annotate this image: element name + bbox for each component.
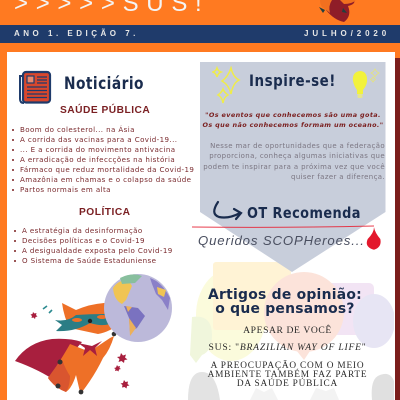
- list: saúde pública: Amazônia em chamas e o colapso da saúde: [20, 175, 191, 184]
- panel: Inspire-se arrow shape: [200, 62, 386, 272]
- icon: light bulb: [352, 68, 380, 98]
- article: meio ambiente: [208, 360, 367, 389]
- body text: Inspire-se: [203, 142, 385, 181]
- body text: Inspire-se: proporciona, conheça algumas iniciativas que: [209, 152, 385, 160]
- paws: [56, 332, 116, 394]
- handwritten text: Queridos SCOPHeroes...: [198, 233, 365, 248]
- icon: sparkles: [212, 66, 240, 104]
- list: saúde pública: Partos normais em alta: [20, 185, 111, 194]
- heading: Saúde Pública: SAÚDE PÚBLICA: [60, 105, 150, 116]
- dark red side strip: [394, 58, 400, 400]
- heading: Noticiário: Noticiário: [64, 74, 144, 94]
- article: meio ambiente: A PREOCUPAÇÃO COM O MEIO: [211, 361, 364, 371]
- article: meio ambiente: AMBIENTE TAMBÉM FAZ PARTE: [208, 370, 367, 380]
- body text: Inspire-se: Nesse mar de oportunidades que a federação: [210, 142, 385, 150]
- list: saúde pública: Boom do colesterol... na Ásia: [20, 125, 135, 134]
- list: saúde pública: A corrida das vacinas para a Covid-19...: [20, 135, 177, 144]
- fox head with mask: [55, 303, 122, 334]
- cape: [15, 339, 82, 382]
- icon: blood drop: [366, 228, 381, 250]
- motion marks: [43, 306, 52, 313]
- heading: Inspire-se: Inspire-se!: [249, 71, 336, 90]
- list: saúde pública: Fármaco que reduz mortalidade da Covid-19: [20, 165, 194, 174]
- list: política: A estratégia da desinformação: [22, 226, 143, 235]
- quote: Os que não conhecemos formam um oceano.": [202, 121, 383, 129]
- article: Apesar de você: APESAR DE VOCÊ: [243, 325, 332, 336]
- arrow: curved: [213, 200, 243, 220]
- fox body: [48, 336, 114, 392]
- list: saúde pública: ... E a corrida do movimento antivacina: [20, 145, 176, 154]
- article: meio ambiente: DA SAÚDE PÚBLICA: [237, 379, 338, 389]
- heading: artigos de opinião: [208, 287, 362, 316]
- list: saúde pública: A erradicação de infeccções na história: [20, 155, 175, 164]
- edition band: [0, 25, 400, 43]
- body text: Inspire-se: quiser fazer a diferença.: [291, 173, 385, 181]
- globe: [104, 274, 172, 342]
- stars: [30, 312, 130, 388]
- illustration: superhero fox holding globe: [15, 274, 172, 394]
- red brush line: [192, 226, 374, 228]
- list: política: O Sistema de Saúde Estaduniense: [22, 256, 156, 265]
- list: saúde pública: [12, 125, 194, 194]
- quote: [202, 111, 383, 129]
- edition number: ANO 1. EDIÇÃO 7.: [14, 29, 139, 38]
- header mascot cape fragment: [319, 0, 356, 22]
- list: política: A desigualdade exposta pelo Covid-19: [22, 246, 173, 255]
- list: política: Decisões políticas e o Covid-19: [22, 236, 145, 245]
- heading: OT Recomenda: OT Recomenda: [247, 204, 361, 222]
- edition date: JULHO/2020: [304, 29, 390, 38]
- heading: Política: POLÍTICA: [79, 207, 131, 218]
- icon: newspaper: [19, 70, 52, 104]
- body text: Inspire-se: podem te inspirar para a próxima vez que você: [203, 163, 385, 171]
- article: SUS: SUS: "BRAZILIAN WAY OF LIFE": [208, 342, 367, 353]
- heading: artigos de opinião: Artigos de opinião:: [208, 287, 362, 303]
- quote: "Os eventos que conhecemos são uma gota.: [205, 111, 381, 119]
- list: política: [14, 226, 173, 265]
- heading: artigos de opinião: o que pensamos?: [215, 300, 355, 316]
